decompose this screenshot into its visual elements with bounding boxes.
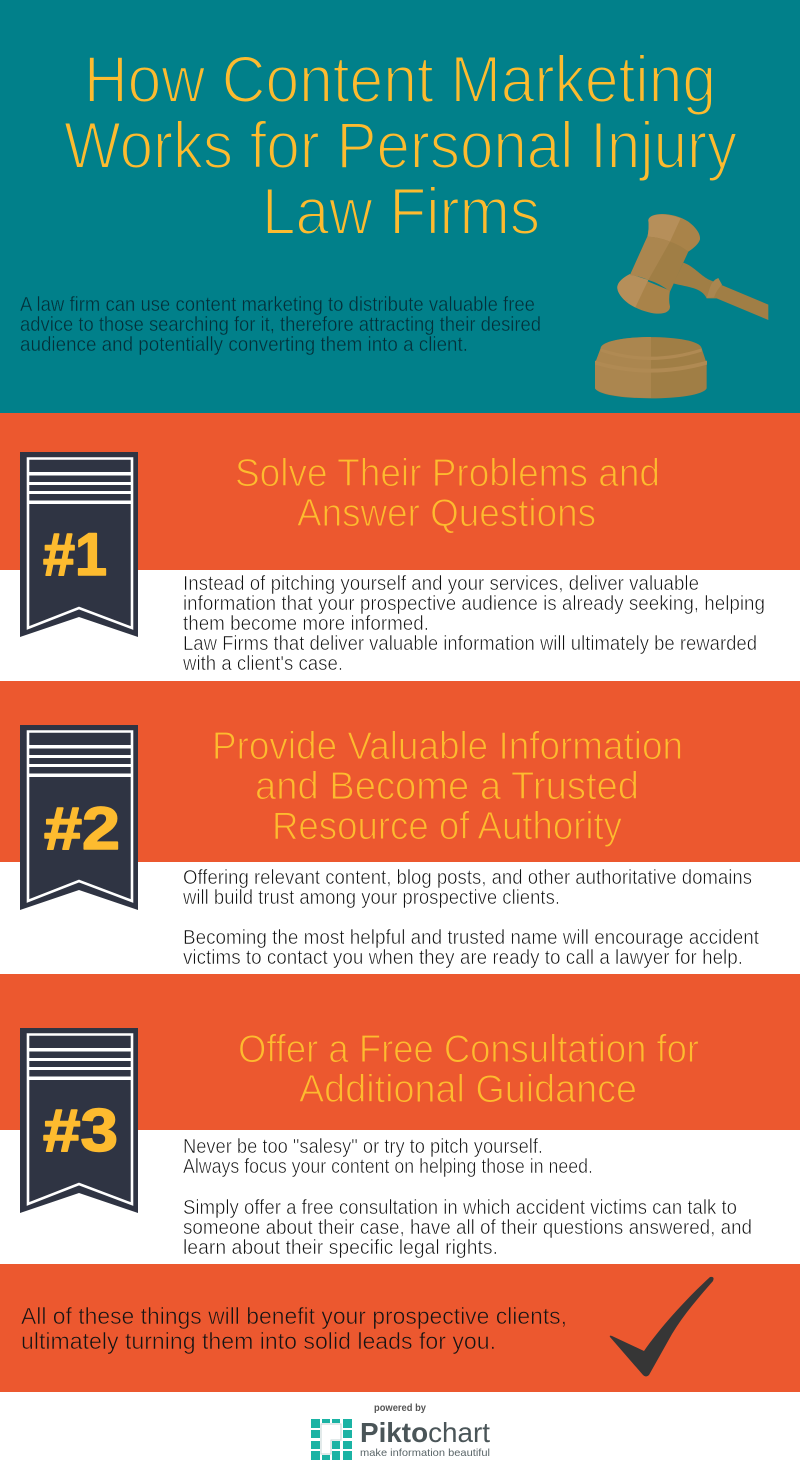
step 2 body text: Becoming the most helpful and trusted name will encourage accident (183, 926, 759, 949)
icon: gavel and sound block (595, 214, 768, 398)
ribbon badge #2: #2 (44, 795, 120, 862)
title: Law Firms (262, 174, 540, 248)
panel: step 2 (0, 681, 800, 969)
conclusion text (21, 1303, 567, 1354)
step 2 heading: Provide Valuable Information (212, 725, 683, 768)
panel: Piktochart footer (0, 1392, 800, 1472)
step 1 heading: Answer Questions (297, 492, 596, 535)
step 1 heading: Solve Their Problems and (235, 452, 660, 495)
step 3 body text: Simply offer a free consultation in which accident victims can talk to (183, 1196, 737, 1219)
step 3 heading: Offer a Free Consultation for (238, 1028, 699, 1071)
step 1 heading (235, 452, 660, 535)
ribbon badge #1 (20, 452, 138, 637)
panel: step 1 (0, 413, 800, 675)
intro text: advice to those searching for it, therefore attracting their desired (20, 313, 541, 336)
icon: check mark (610, 1277, 714, 1376)
step 3 body text: Never be too "salesy" or try to pitch yourself. (183, 1135, 543, 1158)
ribbon badge #3 (20, 1028, 138, 1213)
step 3 body text: someone about their case, have all of their questions answered, and (183, 1216, 752, 1239)
step 3 heading: Additional Guidance (299, 1068, 637, 1111)
icon: Piktochart logo (311, 1419, 352, 1460)
title: Works for Personal Injury (64, 108, 737, 182)
step 2 body text: victims to contact you when they are ready to call a lawyer for help. (183, 946, 743, 969)
step 1 body text: with a client's case. (182, 652, 343, 675)
step 1 body text: Law Firms that deliver valuable information will ultimately be rewarded (183, 632, 757, 655)
step 2 heading: and Become a Trusted (255, 765, 639, 808)
step 2 body text: Offering relevant content, blog posts, and other authoritative domains (183, 866, 752, 889)
tagline: make information beautiful (360, 1447, 490, 1459)
step 2 heading (212, 725, 683, 848)
step 3 body text (183, 1135, 752, 1259)
title: How Content Marketing (84, 42, 716, 116)
step 1 body text (182, 572, 765, 675)
intro text (20, 293, 541, 356)
intro text: audience and potentially converting them into a client. (20, 333, 468, 356)
step 3 body text: Always focus your content on helping those in need. (183, 1155, 593, 1178)
panel: conclusion (0, 1264, 800, 1392)
step 2 body text: will build trust among your prospective clients. (182, 886, 560, 909)
step 1 body text: them become more informed. (183, 612, 429, 635)
ribbon badge #1: #1 (43, 521, 107, 588)
step 3 heading (238, 1028, 699, 1111)
conclusion text: ultimately turning them into solid leads for you. (21, 1328, 496, 1354)
step 1 body text: Instead of pitching yourself and your services, deliver valuable (183, 572, 699, 595)
title (64, 42, 737, 248)
powered by label: powered by (374, 1403, 426, 1414)
panel: header (0, 0, 800, 413)
step 2 heading: Resource of Authority (272, 805, 623, 848)
step 2 body text (182, 866, 759, 969)
step 1 body text: information that your prospective audience is already seeking, helping (183, 592, 765, 615)
conclusion text: All of these things will benefit your prospective clients, (21, 1303, 567, 1329)
intro text: A law firm can use content marketing to distribute valuable free (20, 293, 535, 316)
panel: step 3 (0, 974, 800, 1259)
ribbon badge #3: #3 (43, 1097, 118, 1164)
step 3 body text: learn about their specific legal rights. (183, 1236, 498, 1259)
ribbon badge #2 (20, 725, 138, 910)
Piktochart wordmark: Piktochart (360, 1417, 490, 1448)
